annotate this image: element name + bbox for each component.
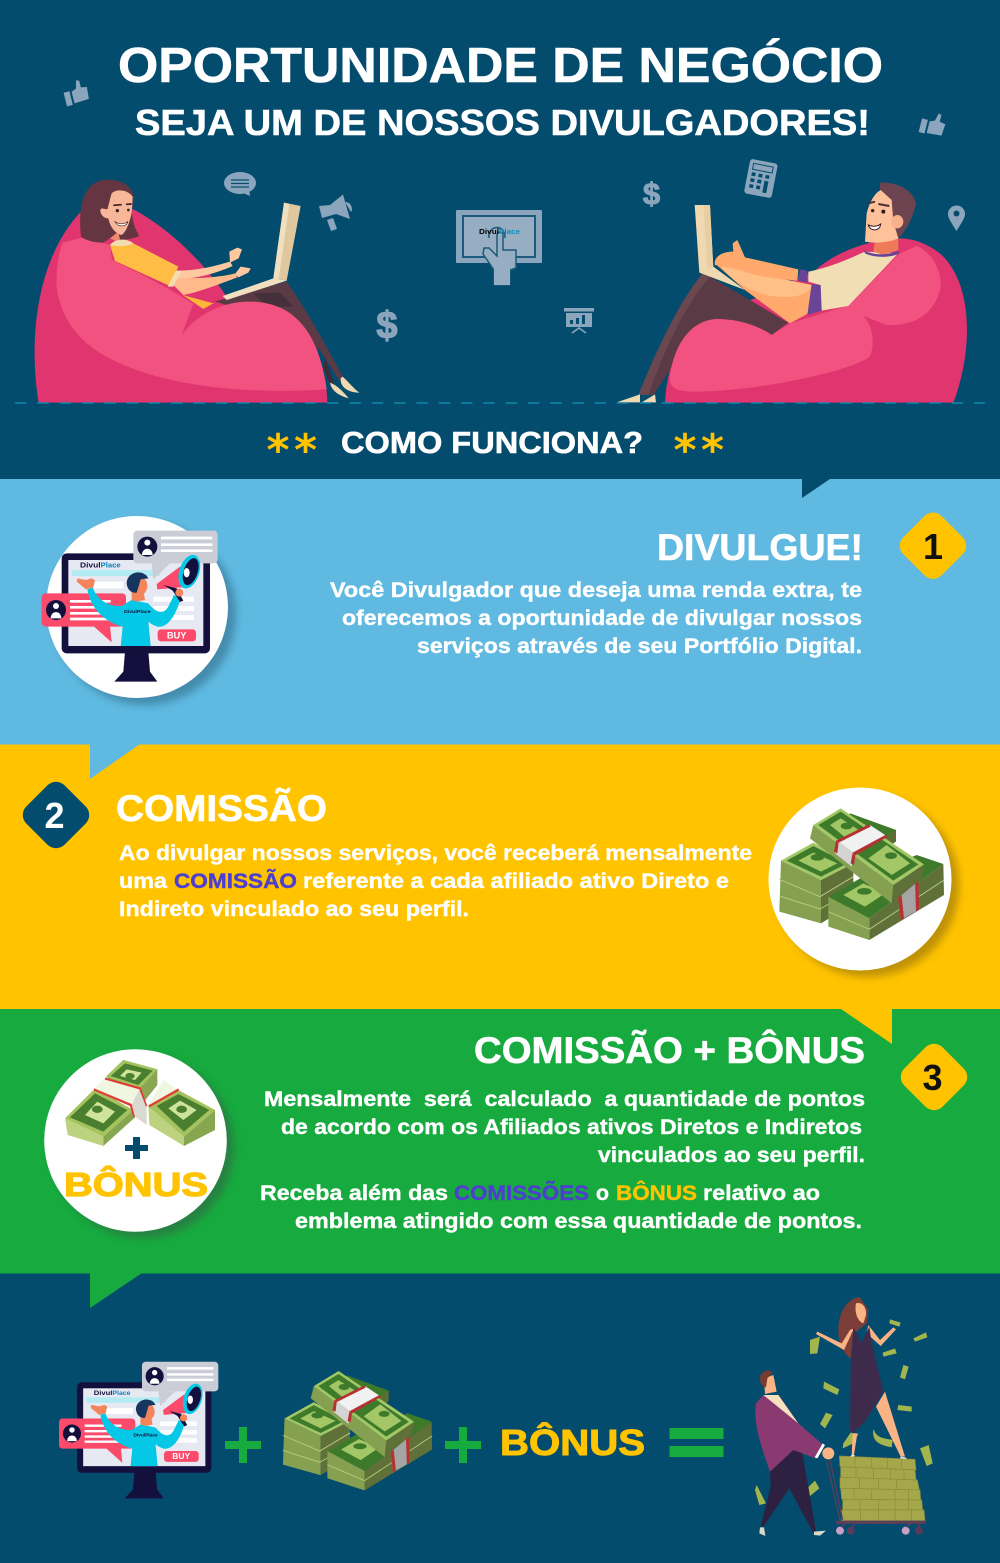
illustration: couple with money cart bbox=[755, 1297, 933, 1536]
heading: divulgue: DIVULGUE! bbox=[657, 527, 863, 568]
circle image: shadow bbox=[777, 795, 959, 977]
illustration: monitor and promoter: Place bbox=[112, 1390, 131, 1397]
text block: step 2: Ao divulgar nossos serviços, você receberá mensalmente bbox=[119, 841, 752, 865]
illustration: monitor and promoter: Divul bbox=[80, 563, 101, 570]
heading: comissao + bonus: COMISSÃO + BÔNUS bbox=[474, 1029, 865, 1071]
illustration: monitor and promoter: BUY bbox=[167, 630, 187, 640]
circle image: white disc bbox=[768, 788, 952, 970]
text block: step 3: Receba além das bbox=[260, 1181, 448, 1205]
icon: presentation board bbox=[564, 308, 594, 333]
icon: dollar sign left: $ bbox=[376, 305, 398, 347]
text block: step 1: Você Divulgador que deseja uma renda extra, te bbox=[330, 578, 862, 602]
badge: 2 bbox=[18, 777, 94, 853]
icon: calculator bbox=[744, 159, 778, 198]
circle image: white disc bbox=[46, 516, 228, 698]
text block: step 3 bbox=[260, 1087, 865, 1233]
illustration: monitor and promoter: BUY bbox=[172, 1451, 190, 1461]
icon: thumbs up left bbox=[61, 78, 90, 106]
text block: step 2: Indireto vinculado ao seu perfil. bbox=[119, 897, 469, 921]
text block: step 2: referente a cada afiliado ativo Direto e bbox=[303, 869, 729, 893]
text block: step 2 bbox=[119, 841, 752, 921]
text block: step 2: COMISSÃO bbox=[174, 868, 297, 893]
text block: step 3: emblema atingido com essa quantidade de pontos. bbox=[295, 1209, 862, 1233]
money pile bbox=[839, 1456, 925, 1521]
text block: step 1: serviços através de seu Portfólio Digital. bbox=[417, 634, 862, 658]
left asterisks: ** bbox=[266, 425, 322, 476]
illustration: monitor and promoter: Divul bbox=[94, 1390, 113, 1397]
panel: step 1 divulgue bbox=[0, 479, 1000, 744]
circle image: shadow bbox=[54, 523, 236, 705]
illustration: man on beanbag bbox=[617, 183, 967, 403]
illustration: money with band bbox=[65, 1060, 215, 1146]
notch bbox=[90, 744, 140, 779]
header background panel bbox=[0, 0, 1000, 480]
icon: map pin bbox=[948, 206, 965, 231]
text block: step 3: vinculados ao seu perfil. bbox=[598, 1143, 865, 1167]
text block: step 3: COMISSÕES bbox=[454, 1180, 589, 1205]
illustration: money stacks bbox=[779, 808, 944, 940]
badge: 1: 1 bbox=[923, 526, 943, 567]
icon: plus 1 bbox=[225, 1427, 261, 1463]
text block: step 3: relativo ao bbox=[703, 1181, 820, 1205]
illustration: money stacks bbox=[283, 1371, 432, 1490]
dashed ground line bbox=[15, 402, 985, 404]
heading: comissao: COMISSÃO bbox=[116, 787, 327, 829]
text block: step 1: oferecemos a oportunidade de divulgar nossos bbox=[342, 606, 862, 630]
illustration: monitor and promoter bbox=[42, 531, 218, 682]
illustration: monitor and promoter bbox=[59, 1362, 218, 1498]
notch bbox=[90, 1273, 142, 1308]
notch bbox=[802, 479, 830, 498]
right asterisks: ** bbox=[674, 425, 729, 476]
icon: speech bubble bbox=[224, 172, 256, 196]
notch bbox=[841, 1009, 892, 1044]
heading: como funciona: COMO FUNCIONA? bbox=[341, 425, 643, 460]
title: OPORTUNIDADE DE NEGÓCIO bbox=[118, 38, 883, 93]
text block: step 3: o bbox=[596, 1181, 609, 1205]
illustration: monitor and promoter: DivulPlace bbox=[124, 609, 151, 614]
bonus word: BÔNUS bbox=[500, 1421, 645, 1463]
cart bbox=[836, 1521, 926, 1524]
icon: thumbs up right bbox=[919, 110, 948, 138]
icon: touch screen monitor with logo: Divul bbox=[479, 227, 499, 236]
icon: touch screen monitor with logo bbox=[456, 210, 542, 285]
icon: touch screen monitor with logo: Place bbox=[499, 227, 520, 236]
illustration: woman on beanbag bbox=[35, 180, 359, 403]
man bbox=[761, 1450, 816, 1532]
text block: step 3: BÔNUS bbox=[616, 1180, 697, 1205]
badge: 2: 2 bbox=[44, 795, 65, 836]
woman bbox=[838, 1297, 868, 1358]
subtitle: SEJA UM DE NOSSOS DIVULGADORES! bbox=[135, 102, 870, 143]
badge: 3: 3 bbox=[922, 1057, 943, 1098]
text block: step 3: Mensalmente será calculado a quantidade de pontos bbox=[264, 1087, 865, 1111]
text block: step 3: de acordo com os Afiliados ativos Diretos e Indiretos bbox=[281, 1115, 862, 1139]
icon: dollar sign right: $ bbox=[643, 176, 660, 211]
panel: step 2 comissao bbox=[0, 744, 1000, 1010]
panel: step 3 comissao + bonus bbox=[0, 1009, 1000, 1274]
panel: bottom equation bbox=[0, 1273, 1000, 1563]
badge: 1 bbox=[895, 508, 971, 584]
badge: 3 bbox=[896, 1039, 972, 1115]
illustration: monitor and promoter: DivulPlace bbox=[134, 1432, 158, 1437]
falling bills bbox=[755, 1319, 933, 1505]
icon: plus 2 bbox=[445, 1427, 481, 1463]
icon: equals bbox=[670, 1428, 724, 1457]
text block: step 1 bbox=[330, 578, 862, 658]
icon: plus bbox=[125, 1137, 148, 1159]
icon: megaphone bbox=[319, 194, 352, 231]
circle image: shadow bbox=[52, 1056, 234, 1238]
illustration: monitor and promoter: Place bbox=[101, 563, 121, 570]
circle image: white disc bbox=[44, 1049, 227, 1232]
text block: step 2: uma bbox=[119, 869, 168, 893]
bonus word in circle: BÔNUS bbox=[64, 1165, 208, 1204]
